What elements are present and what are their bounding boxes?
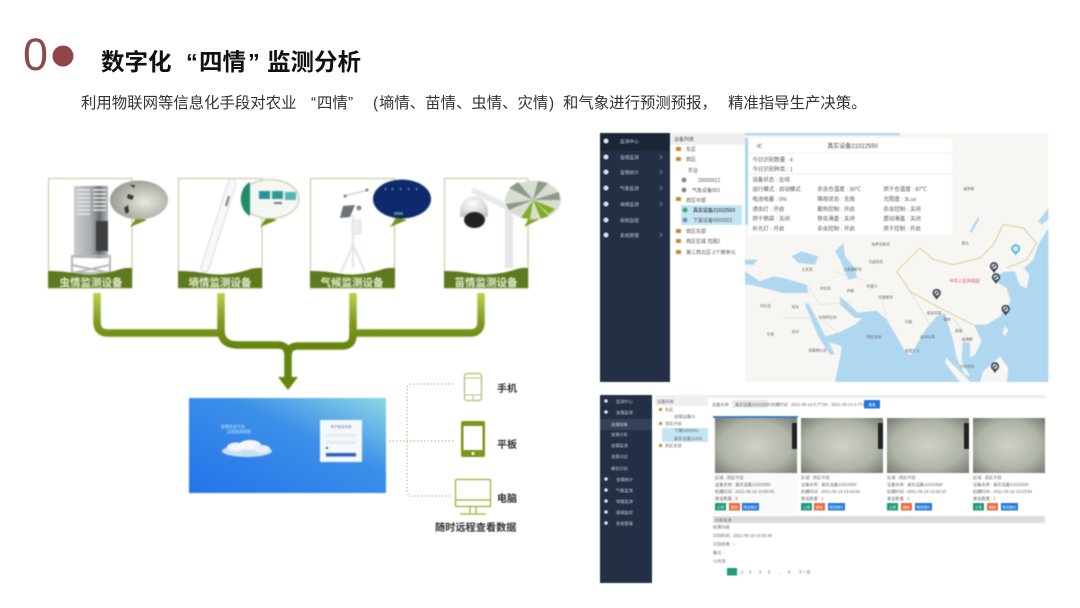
device info popup: 真实设备21022550 <box>827 142 879 150</box>
device info popup: 今日识别数量 : 4 <box>752 156 793 164</box>
device info popup: 今日识别种类 : 1 <box>752 165 793 173</box>
image card 3: 害虫数量 : 2 <box>887 495 910 502</box>
device info popup: 降雨状态 : 无雨 <box>817 195 855 203</box>
title: 四情 <box>199 49 246 75</box>
device info popup: 杀虫控制 : 开启 <box>817 225 855 233</box>
country borders <box>897 225 1037 325</box>
map labels: 伊朗 <box>847 288 854 293</box>
map labels: 苏丹 <box>792 329 799 334</box>
image card 4: 删除 <box>989 504 996 510</box>
pagination: 下一页 <box>798 570 811 576</box>
image card 3: 删除 <box>903 504 910 510</box>
top filter bar <box>708 395 1045 408</box>
image card 3: 拍摄时间 : 2021-05-19 13:30:23 <box>887 488 947 495</box>
device tree: 西区区域 范围2 <box>686 238 720 245</box>
map labels: 中华人民共和国 <box>949 277 980 284</box>
top filter bar: 真实设备21022550 <box>735 401 771 408</box>
image card 2: 设备名称 : 真实设备21022550 <box>801 481 857 488</box>
caption: 随时远程查看数据 <box>435 521 516 534</box>
analysis section: 结果内容 <box>713 524 730 530</box>
device tree: 设备列表 <box>657 398 675 405</box>
map <box>745 133 1048 382</box>
green wave label band <box>310 268 395 288</box>
dark sidebar: 墒情监测 <box>620 201 639 208</box>
map labels: 马来西亚 <box>960 363 975 368</box>
cloud graphic <box>222 440 272 457</box>
sidebar <box>600 395 652 583</box>
image card 3: 上传 <box>889 504 896 510</box>
device info popup: 补光灯 : 开启 <box>752 225 784 233</box>
map labels: 土库曼斯坦 <box>843 267 862 272</box>
subtitle: 和气象进行预测预报， <box>563 94 717 112</box>
image card 1: 删除 <box>731 504 738 510</box>
analysis section: 识别结果 : -- <box>713 540 737 548</box>
device tree: 设备列表 <box>674 136 694 143</box>
map labels: 利比亚 <box>760 303 771 308</box>
arrow head <box>278 377 298 390</box>
login card: 用户登录系统 <box>330 424 352 429</box>
device tree: 西区中部 <box>686 197 706 204</box>
analysis section: 分析信息 <box>715 516 732 524</box>
image card 4 <box>973 418 1045 510</box>
device info popup: 杀虫控制 : 关闭 <box>883 205 921 213</box>
map labels: 哈萨克斯坦 <box>872 241 890 246</box>
image card 1: 害虫数量 : 3 <box>715 495 738 502</box>
label: 气候监测设备 <box>320 276 384 289</box>
map labels: 印度 <box>905 319 913 324</box>
subtitle: ” <box>348 95 353 112</box>
map labels: 沙特阿拉伯 <box>818 315 837 320</box>
slogan <box>221 423 251 434</box>
sidebar: 虫情分析 <box>611 431 628 438</box>
dark sidebar <box>600 133 670 382</box>
device info popup: 诱虫灯 : 开启 <box>752 205 784 213</box>
image card 3: 设备名称 : 真实设备21022550 <box>887 481 943 488</box>
device tree: 西区 <box>686 157 696 163</box>
pagination: 2 <box>741 570 744 574</box>
map labels: 蒙古 <box>962 240 969 245</box>
device info popup: 杀虫仓温度 : 30℃ <box>817 185 861 193</box>
analysis section: 识别时间 : 2021-05-19 14:05:45 <box>713 532 773 539</box>
map labels: 孟加拉国 <box>927 310 942 315</box>
device tree: 真实设备21022550 <box>693 207 735 214</box>
map labels: 阿拉伯海 <box>867 334 882 339</box>
map labels: 埃及 <box>792 304 799 309</box>
map labels: 柬埔寨 <box>962 337 973 342</box>
device tree: 西区北部 <box>665 442 682 449</box>
map labels: 缅甸 <box>943 317 951 322</box>
section number 0 with dot: 0 <box>23 29 48 80</box>
device tree: 东区 <box>686 146 696 153</box>
device info popup: 移虫滑盖 : 关闭 <box>817 215 855 223</box>
title: “ <box>186 49 198 75</box>
top filter bar: 设备名称 <box>712 401 729 408</box>
map labels: 伊拉克 <box>820 286 831 291</box>
device tree: 气象设备001 <box>692 187 721 194</box>
device card: weather station <box>310 178 431 289</box>
map labels: 孟加拉湾 <box>920 334 935 339</box>
image card 3: 区域 : 西区中部 <box>887 474 916 481</box>
green wave label band <box>48 268 132 288</box>
ocean <box>825 228 1048 382</box>
dark sidebar: 虫情统计 <box>620 169 639 176</box>
image card 4: 拍摄时间 : 2021-05-19 13:23:54 <box>973 488 1033 495</box>
screenshot: map monitoring <box>600 133 1048 382</box>
login card <box>320 420 362 462</box>
sidebar: 监测中心 <box>616 398 634 405</box>
subtitle: ) <box>549 95 554 112</box>
device tree: 东区 <box>665 406 673 412</box>
map labels: 土耳其 <box>802 266 813 271</box>
image card 4: 区域 : 西区中部 <box>973 474 1002 481</box>
device info popup: 运行模式 : 自动模式 <box>752 185 801 193</box>
platform login screenshot <box>189 398 386 493</box>
speech bubble: insects <box>110 180 168 227</box>
slogan: 智慧农业平台 <box>221 423 245 429</box>
map labels: 俄罗斯 <box>963 186 975 191</box>
image card 1: 拍摄时间 : 2021-05-19 14:00:00 <box>715 488 775 495</box>
Indochina and islands <box>945 313 982 376</box>
map labels: 乌兹别克 <box>868 259 883 264</box>
device tree: 下属0000001 <box>674 428 699 434</box>
image card 2: 删除 <box>816 504 823 510</box>
pagination: 4 <box>759 570 762 574</box>
subtitle: 利用物联网等信息化手段对农业 <box>81 94 296 112</box>
device card: soil moisture sensor <box>178 178 299 289</box>
icon: weather station <box>340 188 368 272</box>
connector pipes to platform <box>97 293 481 379</box>
label: 墒情监测设备 <box>188 276 252 289</box>
dark sidebar: 视频监控 <box>620 217 639 224</box>
top filter bar: 搜索 <box>868 402 876 407</box>
device info popup: 光照度 : 3Lux <box>883 195 917 203</box>
sidebar: 模型识别 <box>611 465 628 472</box>
device info popup: 震动滑盖 : 关闭 <box>883 215 921 223</box>
dotted connector lines <box>389 384 454 496</box>
icon: dome camera <box>460 190 509 268</box>
device info popup: ≪ <box>756 143 762 150</box>
device info popup: 烘干控制 : 开启 <box>883 225 921 233</box>
label: phone: 手机 <box>497 382 517 395</box>
device tree <box>655 395 708 583</box>
pagination: 5 <box>768 570 771 574</box>
image card 3 <box>887 418 969 510</box>
icon: soil probe <box>205 183 232 268</box>
device info popup: 电池电量 : 0% <box>752 195 787 203</box>
pagination: … <box>778 570 782 574</box>
top filter bar: 2021-05-14 0:77:00 - 2021-05-14 4:77:00 <box>791 402 869 407</box>
device info popup: 烘干倒袋 : 关闭 <box>752 215 790 223</box>
icon: computer <box>456 480 490 514</box>
label: tablet: 平板 <box>497 438 517 451</box>
sidebar: 系统管理 <box>616 520 634 527</box>
device tree: 西区东部 <box>686 228 706 235</box>
analysis section <box>713 516 1045 564</box>
map labels <box>760 186 980 368</box>
map labels: 巴基斯坦 <box>878 295 893 300</box>
subtitle: 四情 <box>317 94 348 112</box>
device card: seedling camera <box>444 178 561 289</box>
pagination <box>727 568 811 576</box>
map labels: 阿富汗 <box>867 283 878 288</box>
subtitle: “ <box>311 95 316 112</box>
sidebar: 虫情监测 <box>611 442 628 449</box>
icon: tablet <box>461 421 485 457</box>
image card 2 <box>801 418 883 510</box>
image card 2: 害虫数量 : 1 <box>801 495 824 502</box>
inland seas <box>745 133 1048 355</box>
device tree: 虫情设备01 <box>674 413 696 420</box>
image card 1: 区域 : 西区中部 <box>715 474 744 481</box>
device tree: 第三西北区-2个微单元 <box>686 249 735 256</box>
label: 苗情监测设备 <box>454 276 518 289</box>
image card 4: 预览照片 <box>1002 504 1017 510</box>
image card 2: 拍摄时间 : 2021-05-19 13:44:54 <box>801 488 861 495</box>
image card 1 <box>713 416 798 515</box>
device info popup: 烘干仓温度 : 87℃ <box>883 185 927 193</box>
dark sidebar: 虫情监测 <box>620 154 639 161</box>
sidebar: 虫情对比 <box>611 453 628 460</box>
device pins <box>933 245 1019 373</box>
speech bubble: soil data <box>241 180 299 227</box>
dark sidebar: 监测中心 <box>620 138 639 145</box>
image card 4: 上传 <box>975 504 982 510</box>
device info popup: 设备状态 : 在线 <box>752 176 790 184</box>
top filter bar: 拍摄时间 <box>771 401 788 408</box>
sidebar: 视频监控 <box>616 509 634 516</box>
dark sidebar: 系统管理 <box>620 232 639 239</box>
analysis section: 备注 : <box>713 549 724 556</box>
device tree: 下属设备0000001 <box>693 217 733 224</box>
label: 虫情监测设备 <box>60 276 123 289</box>
section number 0 with dot <box>23 29 74 80</box>
subtitle: 墒情、苗情、虫情、灾情 <box>379 94 548 112</box>
title: 监测分析 <box>267 49 361 75</box>
sidebar: 虫情图集 <box>611 421 629 428</box>
sidebar: 墒情监测 <box>616 498 633 505</box>
icon: phone <box>464 374 482 400</box>
subtitle: 精准指导生产决策。 <box>728 94 867 112</box>
device card: insect monitor <box>48 178 168 289</box>
title: ” <box>248 49 260 75</box>
pagination: 3 <box>749 570 752 574</box>
image card 4: 设备名称 : 真实设备21022550 <box>973 481 1029 488</box>
image card 1: 设备名称 : 真实设备21022550 <box>715 481 771 488</box>
map labels: 斯里兰卡 <box>905 348 920 353</box>
device tree: 20000912 <box>698 178 720 184</box>
sidebar: 虫情统计 <box>616 476 633 483</box>
device tree: 真实设备21022 <box>674 435 703 442</box>
map labels: 埃塞俄比亚 <box>808 347 827 352</box>
map labels: 乍得 <box>767 331 774 336</box>
subtitle: ( <box>373 95 379 112</box>
device info popup <box>748 138 952 235</box>
slogan: 远程监测系统 <box>227 428 251 434</box>
speech bubble: greenhouse <box>505 180 561 227</box>
sidebar: 气象监测 <box>616 487 633 494</box>
device tree: 西区中部 <box>665 420 682 427</box>
image card 2: 上传 <box>803 504 810 510</box>
image card 1: 上传 <box>717 504 724 510</box>
pagination: 8 <box>788 570 791 574</box>
label: computer: 电脑 <box>497 492 517 505</box>
screenshot: insect image records <box>600 395 1045 583</box>
image card 1: 预览照片 <box>743 504 758 510</box>
green wave label band <box>444 268 528 288</box>
dark sidebar: 气象监测 <box>620 185 639 192</box>
device info popup: 散热控制 : 开启 <box>817 205 855 213</box>
image card 2: 区域 : 西区中部 <box>801 474 830 481</box>
sidebar: 虫情监测 <box>616 409 633 416</box>
device tree: 农业 <box>688 167 698 174</box>
image card 4: 害虫数量 : 1 <box>973 495 996 502</box>
device tree <box>670 133 745 382</box>
image card 3: 预览照片 <box>916 504 931 510</box>
image card 2: 预览照片 <box>829 504 844 510</box>
speech bubble: weather data <box>373 180 431 227</box>
title: 数字化 <box>101 49 172 75</box>
map labels: 泰国 <box>955 328 963 333</box>
green wave label band <box>178 268 262 288</box>
icon: insect monitoring tower <box>72 186 110 273</box>
analysis section: 公共项 <box>713 558 726 564</box>
